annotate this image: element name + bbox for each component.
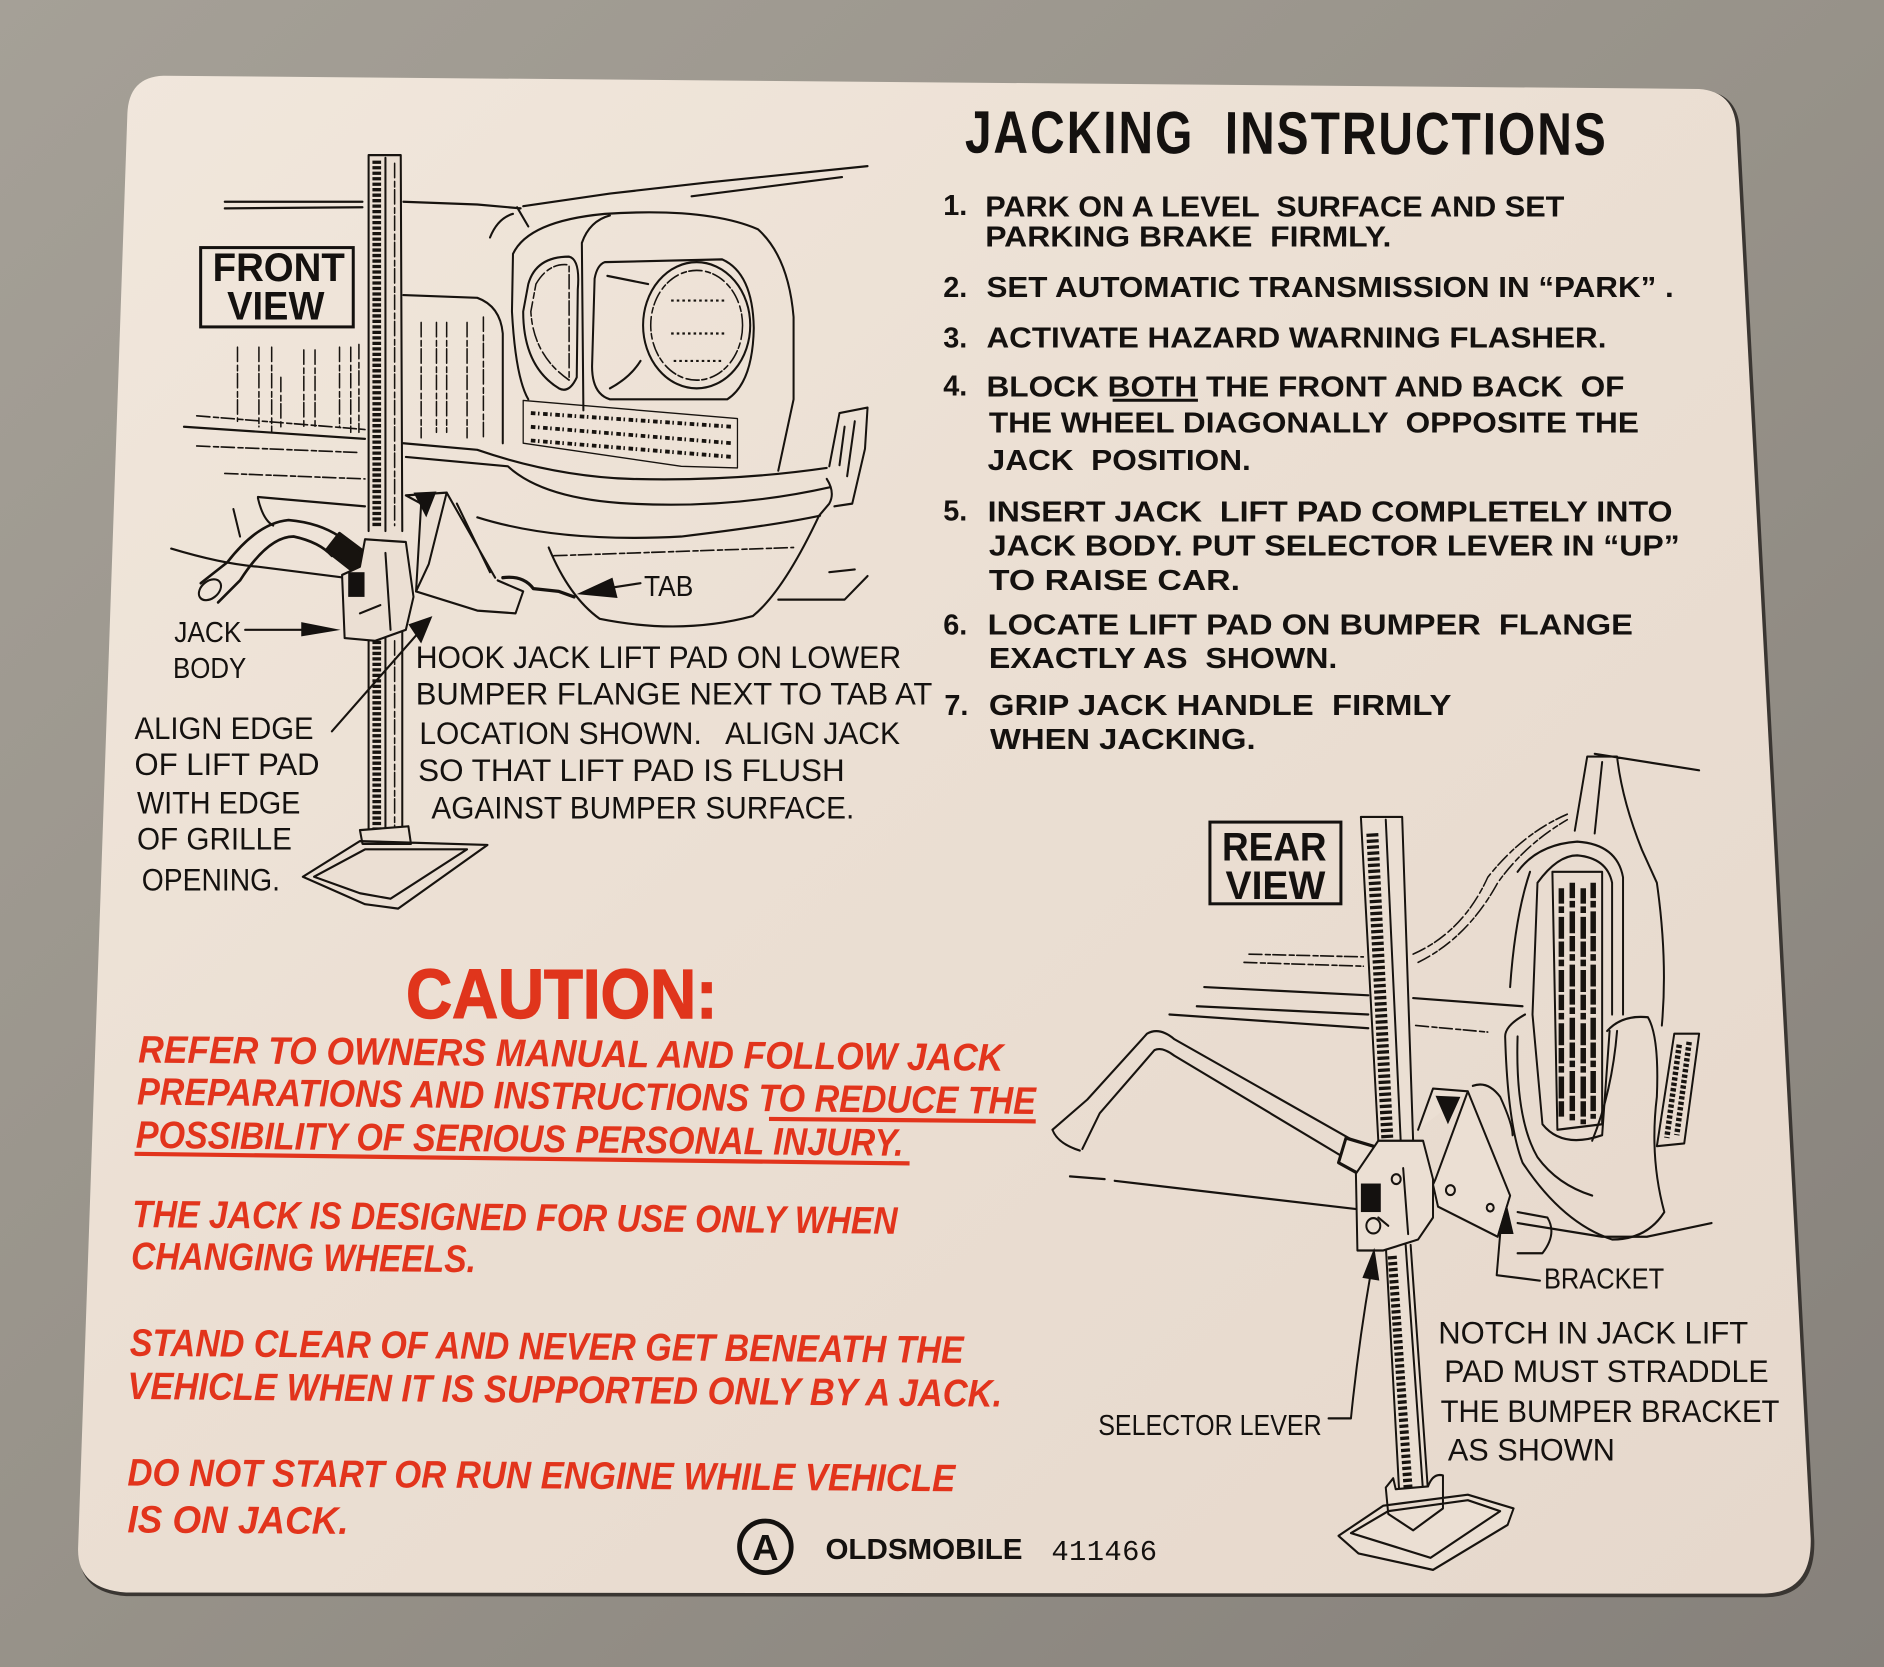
- footer: manufacturer mark: [740, 1521, 1157, 1573]
- headlamp housing: [512, 212, 794, 471]
- caution paragraph 3: [127, 1322, 1002, 1416]
- fender: [1505, 1015, 1664, 1240]
- illustration: rear view of car with jack: [1052, 754, 1712, 1570]
- step 3: 3.: [943, 322, 967, 354]
- step 6: LOCATE LIFT PAD ON BUMPER FLANGE: [988, 610, 1633, 642]
- step 7: [944, 690, 1451, 756]
- grille: [237, 295, 503, 443]
- text: align edge of lift pad: [135, 711, 320, 898]
- caution paragraph 1: POSSIBILITY OF SERIOUS PERSONAL INJURY.: [136, 1114, 904, 1165]
- step 1: [943, 190, 1565, 253]
- label: front view: FRONT: [213, 246, 345, 290]
- caution paragraph 1: PREPARATIONS AND INSTRUCTIONS TO REDUCE THE: [137, 1071, 1037, 1123]
- step 4: 4.: [943, 370, 967, 402]
- quarter panel curve: [1413, 814, 1567, 962]
- caution paragraph 4: DO NOT START OR RUN ENGINE WHILE VEHICLE: [127, 1452, 957, 1500]
- step 4: BLOCK BOTH THE FRONT AND BACK OF: [986, 372, 1624, 404]
- step 2: SET AUTOMATIC TRANSMISSION IN “PARK” .: [986, 272, 1674, 304]
- caution paragraph 2: THE JACK IS DESIGNED FOR USE ONLY WHEN: [132, 1193, 899, 1243]
- step 5: [943, 495, 1680, 597]
- arrow: tab: [577, 578, 641, 598]
- step 5: JACK BODY. PUT SELECTOR LEVER IN “UP”: [989, 530, 1680, 562]
- bumper: [171, 416, 868, 626]
- jack mast upper and lower: [369, 155, 402, 836]
- jack mast upper and lower: [1361, 817, 1428, 1492]
- jack body: [342, 539, 414, 641]
- caution paragraph 1: REFER TO OWNERS MANUAL AND FOLLOW JACK: [138, 1028, 1007, 1080]
- step 5: 5.: [943, 495, 967, 527]
- step 1: PARK ON A LEVEL SURFACE AND SET: [985, 191, 1565, 223]
- label: jack body: [173, 617, 246, 685]
- caution paragraph 3: STAND CLEAR OF AND NEVER GET BENEATH THE: [130, 1322, 965, 1372]
- caution paragraph 4: IS ON JACK.: [127, 1498, 349, 1543]
- step 6: 6.: [943, 610, 967, 642]
- text: notch in jack lift pad: [1438, 1316, 1779, 1467]
- step 1: 1.: [943, 190, 967, 222]
- step 7: WHEN JACKING.: [990, 724, 1256, 756]
- text: hook jack lift pad: BUMPER FLANGE NEXT TO TAB AT: [416, 676, 932, 711]
- lift pad and bracket: [406, 492, 574, 613]
- step 4: THE WHEEL DIAGONALLY OPPOSITE THE: [989, 408, 1639, 440]
- jack body: [1356, 1141, 1433, 1250]
- label: front view: VIEW: [227, 285, 325, 329]
- text: notch in jack lift pad: NOTCH IN JACK LIFT: [1438, 1316, 1748, 1351]
- turn signal lens: [523, 400, 737, 468]
- label: tab: TAB: [644, 571, 693, 603]
- label: bracket: BRACKET: [1544, 1263, 1664, 1295]
- caution paragraph 3: VEHICLE WHEN IT IS SUPPORTED ONLY BY A JACK.: [127, 1365, 1002, 1416]
- text: align edge of lift pad: WITH EDGE: [137, 786, 300, 821]
- text: hook jack lift pad: AGAINST BUMPER SURFACE.: [431, 790, 854, 825]
- instructions list: [943, 190, 1680, 756]
- rear body lines: [1575, 754, 1699, 1025]
- jack base: [1339, 1475, 1514, 1570]
- text: align edge of lift pad: OF GRILLE: [137, 822, 292, 857]
- brand name: OLDSMOBILE: [825, 1534, 1023, 1566]
- bumper edge line: [1518, 1223, 1712, 1237]
- illustration: front view of car with jack: [171, 155, 868, 909]
- caution text: [127, 1028, 1037, 1543]
- text: hook jack lift pad: [416, 640, 932, 825]
- caution paragraph 2: CHANGING WHEELS.: [131, 1235, 476, 1281]
- horizontal body lines: [1070, 987, 1523, 1209]
- step 4: JACK POSITION.: [988, 445, 1251, 477]
- step 7: 7.: [944, 690, 968, 722]
- bumper guard: [829, 408, 868, 506]
- icon: circled A: [740, 1521, 791, 1573]
- step 6: EXACTLY AS SHOWN.: [989, 643, 1337, 675]
- tail lamp: [1510, 842, 1623, 1140]
- label: rear view: [1210, 822, 1341, 908]
- label: selector lever: SELECTOR LEVER: [1098, 1410, 1322, 1442]
- text: align edge of lift pad: OF LIFT PAD: [135, 747, 320, 782]
- text: hook jack lift pad: SO THAT LIFT PAD IS FLUSH: [418, 753, 845, 788]
- step 5: TO RAISE CAR.: [989, 565, 1240, 597]
- caution paragraph 1: [135, 1028, 1037, 1165]
- label: rear view: REAR: [1222, 826, 1326, 870]
- arrow: selector lever: [1329, 1248, 1379, 1418]
- jack handle: [195, 520, 365, 605]
- label: jack body: BODY: [173, 653, 246, 685]
- dashed body lines: [1244, 954, 1488, 1032]
- step 4: [943, 370, 1639, 477]
- jack handle: [1052, 1031, 1406, 1174]
- text: align edge of lift pad: ALIGN EDGE: [135, 711, 314, 746]
- icon: circled A: A: [752, 1527, 779, 1568]
- text: hook jack lift pad: LOCATION SHOWN. ALIGN JACK: [419, 716, 900, 751]
- label: rear view: VIEW: [1226, 864, 1326, 908]
- caution paragraph 4: [127, 1452, 957, 1543]
- hood and cowl lines: [225, 166, 868, 237]
- step 6: [943, 610, 1633, 675]
- arrow: bracket: [1497, 1204, 1540, 1281]
- title: JACKING INSTRUCTIONS: [965, 99, 1608, 168]
- arrow: jack body: [245, 622, 341, 636]
- step 1: PARKING BRAKE FIRMLY.: [985, 221, 1391, 253]
- label: jack body: JACK: [174, 617, 242, 649]
- jack base: [303, 826, 487, 909]
- label: front view: [201, 246, 353, 329]
- text: notch in jack lift pad: THE BUMPER BRACKET: [1441, 1394, 1779, 1429]
- side reflector plate: [1657, 1034, 1699, 1146]
- part number: 411466: [1051, 1536, 1157, 1569]
- caution paragraph 2: [131, 1193, 899, 1281]
- text: align edge of lift pad: OPENING.: [142, 863, 280, 898]
- lift pad and bracket: [1418, 1084, 1551, 1253]
- text: notch in jack lift pad: PAD MUST STRADDLE: [1444, 1354, 1769, 1389]
- text: hook jack lift pad: HOOK JACK LIFT PAD ON LOWER: [416, 640, 901, 675]
- caution heading: CAUTION:: [406, 955, 717, 1033]
- arrow: align edge of lift pad: [332, 616, 432, 731]
- step 3: ACTIVATE HAZARD WARNING FLASHER.: [986, 322, 1606, 354]
- step 5: INSERT JACK LIFT PAD COMPLETELY INTO: [988, 497, 1673, 529]
- text: notch in jack lift pad: AS SHOWN: [1448, 1432, 1615, 1467]
- step 2: 2.: [943, 272, 967, 304]
- step 7: GRIP JACK HANDLE FIRMLY: [989, 690, 1451, 722]
